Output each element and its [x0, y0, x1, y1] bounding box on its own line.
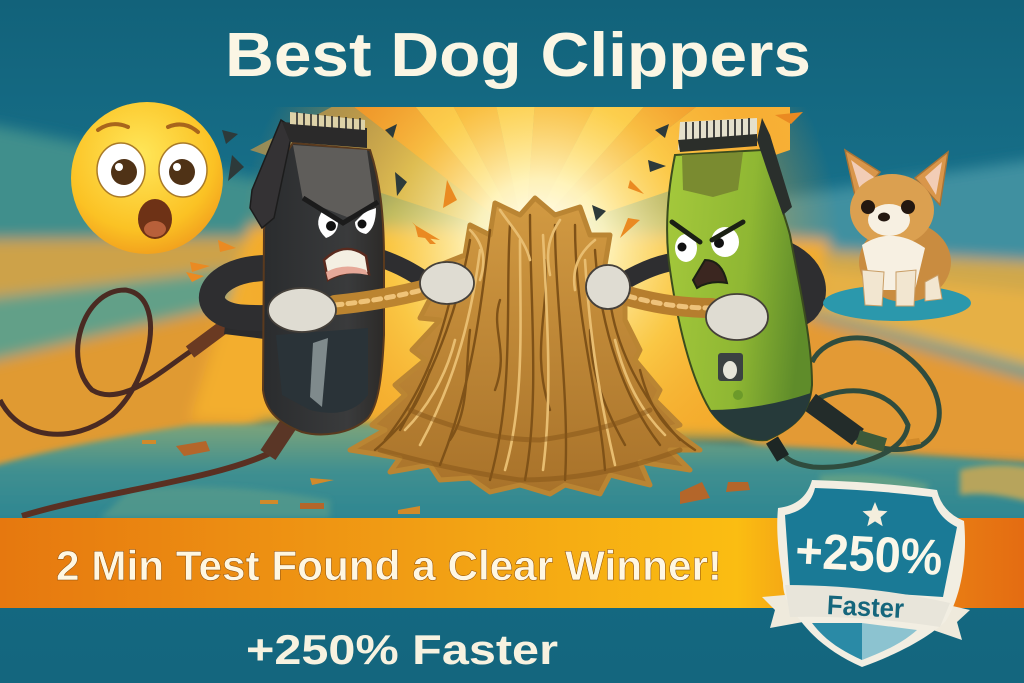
- black clipper: [212, 112, 424, 434]
- window: [682, 152, 743, 197]
- icon: shocked emoji: [71, 102, 223, 254]
- badge value: +250%: [794, 522, 944, 586]
- title: Best Dog Clippers: [225, 21, 811, 90]
- legs: [862, 270, 942, 306]
- switch: [718, 353, 743, 381]
- ears: [845, 150, 948, 205]
- left arm: [212, 268, 272, 318]
- badge label: Faster: [826, 590, 905, 624]
- side flap: [250, 120, 293, 228]
- body: [263, 143, 384, 434]
- right arm: [765, 252, 813, 318]
- mat: [823, 285, 971, 321]
- banner text: 2 Min Test Found a Clear Winner!: [56, 542, 722, 589]
- ground speckle patches: [100, 465, 1024, 518]
- cord: green clipper: [772, 338, 939, 467]
- icon: dog: [823, 150, 971, 321]
- ribbon: [785, 585, 950, 627]
- shield outer: [777, 480, 965, 667]
- footer text: +250% Faster: [246, 626, 558, 673]
- cord: black clipper: [0, 290, 288, 516]
- top plate: [293, 145, 375, 217]
- face: [675, 234, 697, 262]
- face: [318, 210, 338, 238]
- rope of hair: [335, 288, 712, 308]
- left arm: [626, 262, 672, 280]
- hair pile: [350, 198, 700, 494]
- base band: [709, 393, 811, 440]
- gloves: [268, 262, 768, 340]
- badge: +250% Faster shield: [762, 480, 970, 667]
- background rays: [0, 100, 1024, 490]
- blade: [678, 118, 757, 150]
- shield inner: [785, 488, 957, 597]
- shield lower: [812, 623, 862, 660]
- ground: [0, 424, 1024, 530]
- blade: [282, 122, 367, 148]
- banner: [0, 518, 1024, 608]
- ribbon tails: [762, 595, 970, 640]
- right arm: [380, 258, 424, 280]
- green clipper: [626, 118, 813, 440]
- head: [850, 174, 934, 246]
- body: [667, 150, 812, 440]
- side flap: [757, 118, 792, 215]
- star: [862, 502, 888, 526]
- lower panel: [276, 328, 368, 413]
- chest: [862, 236, 925, 290]
- flying debris: [142, 112, 921, 514]
- body: [859, 222, 951, 302]
